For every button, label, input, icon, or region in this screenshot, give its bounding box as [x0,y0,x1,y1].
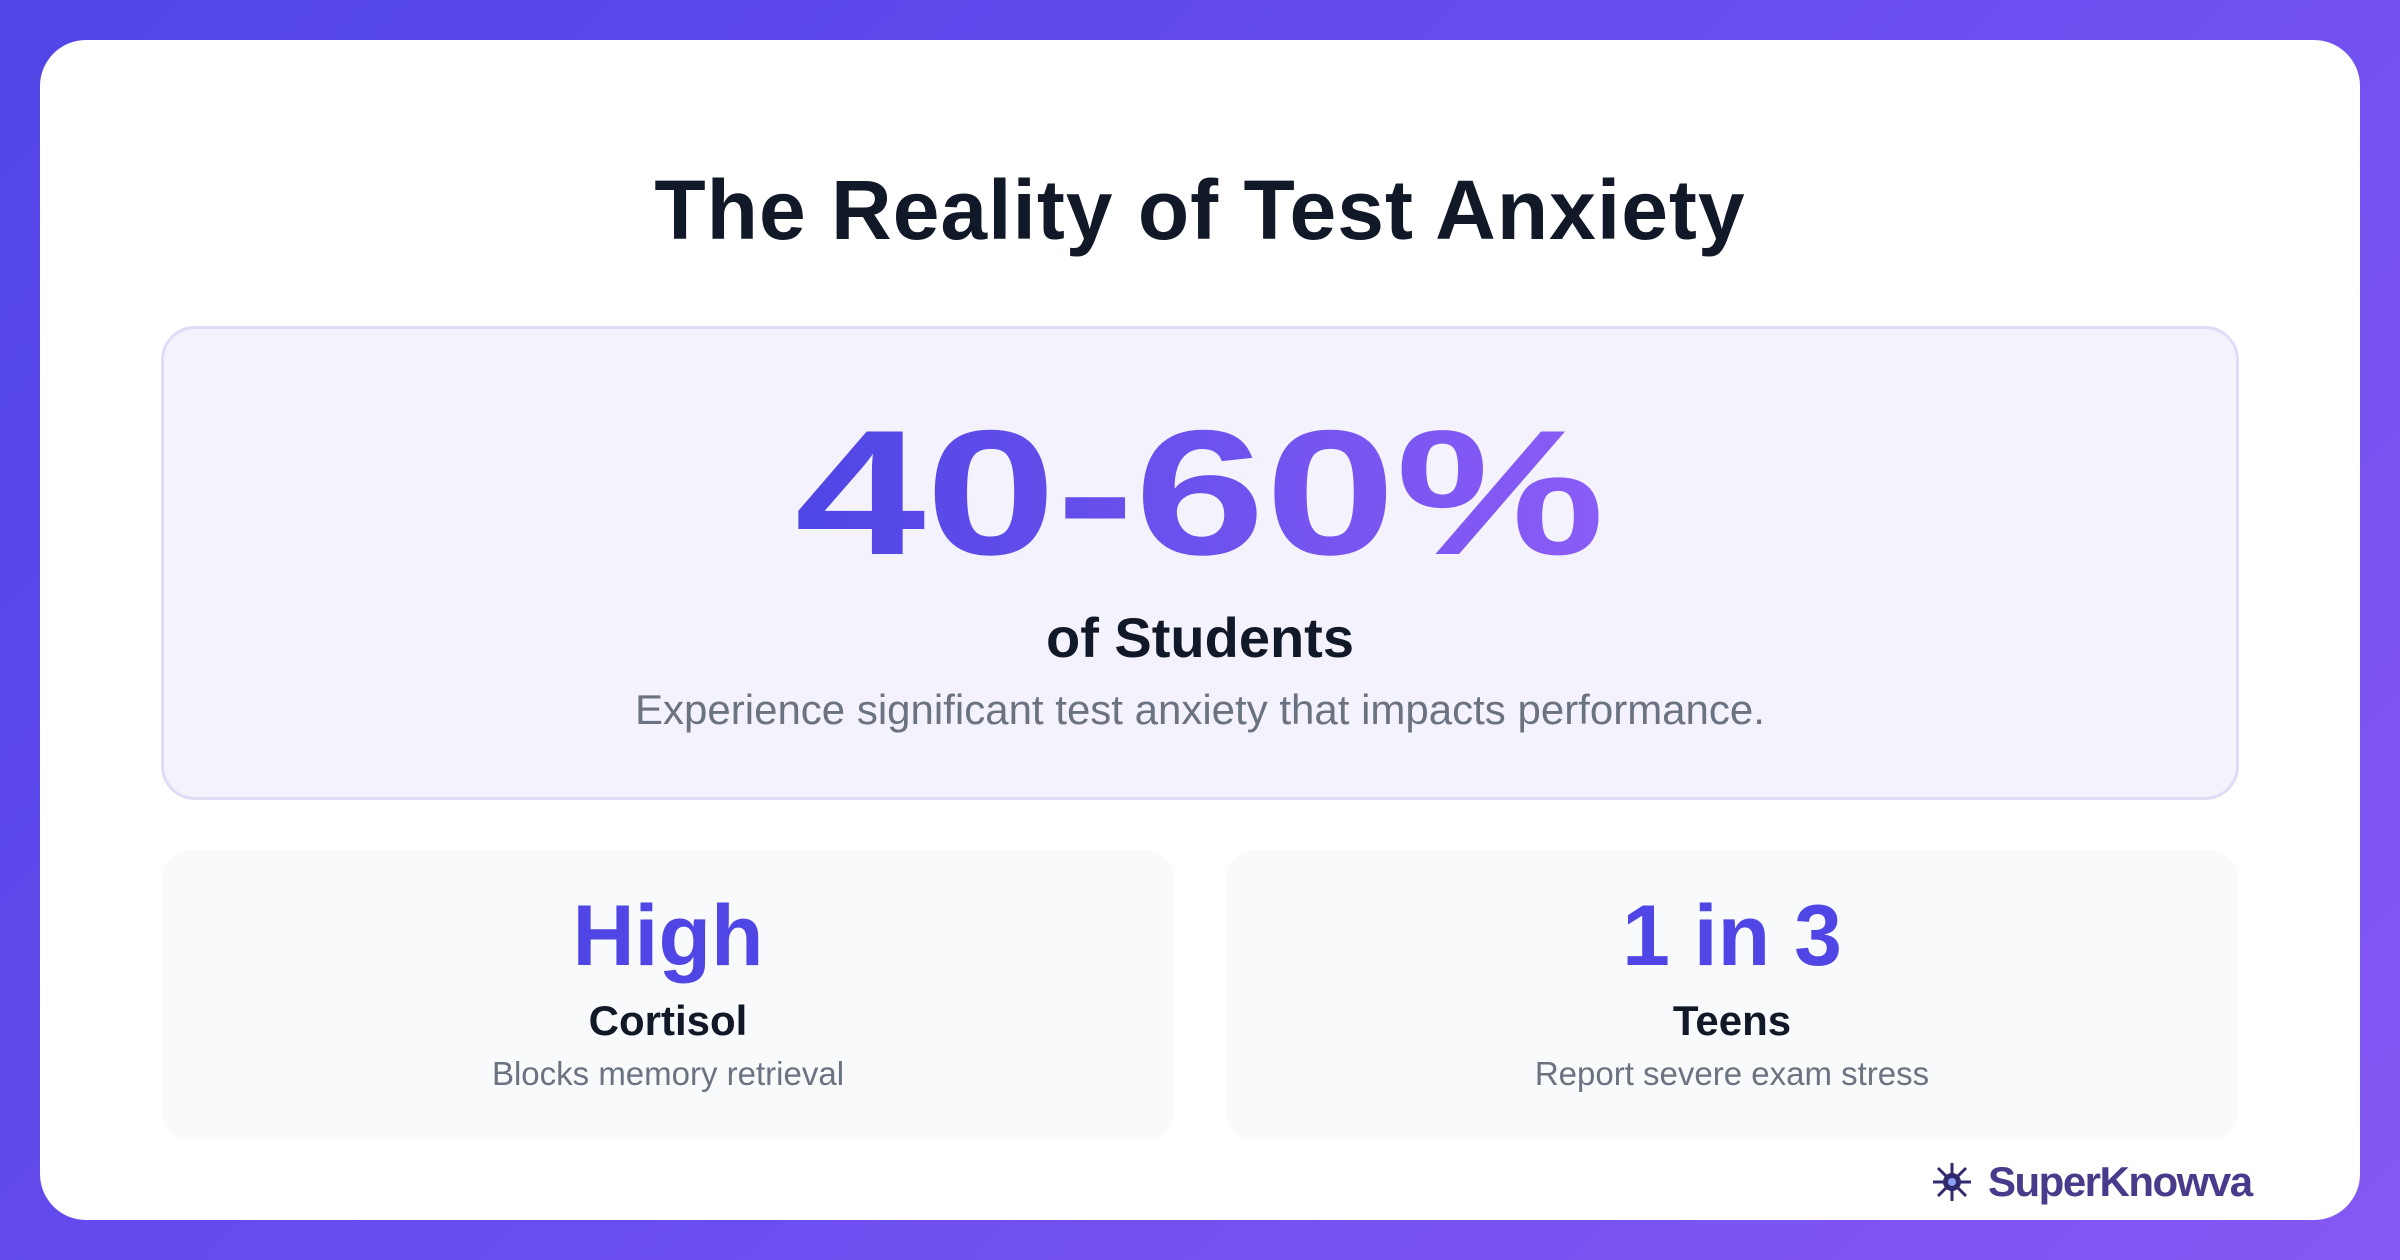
stat: teens desc: Report severe exam stress [1535,1055,1929,1092]
big number: 40-60% [795,393,1605,592]
stat: teens value: 1 in 3 [1622,888,1842,984]
stat: cortisol desc: Blocks memory retrieval [492,1055,844,1092]
icon: logo star [1933,1163,1971,1201]
title: The Reality of Test Anxiety [654,163,1746,257]
hero description: Experience significant test anxiety that impacts performance. [635,686,1765,733]
logo: SuperKnowva [1988,1158,2252,1205]
panel: hero stat [161,326,2239,800]
stat: teens label: Teens [1673,997,1791,1044]
panel: cortisol [161,850,1175,1140]
stat: cortisol label: Cortisol [589,997,747,1044]
hero label: of Students [1046,606,1354,669]
stat: cortisol value: High [572,888,764,984]
panel: teens [1225,850,2239,1140]
